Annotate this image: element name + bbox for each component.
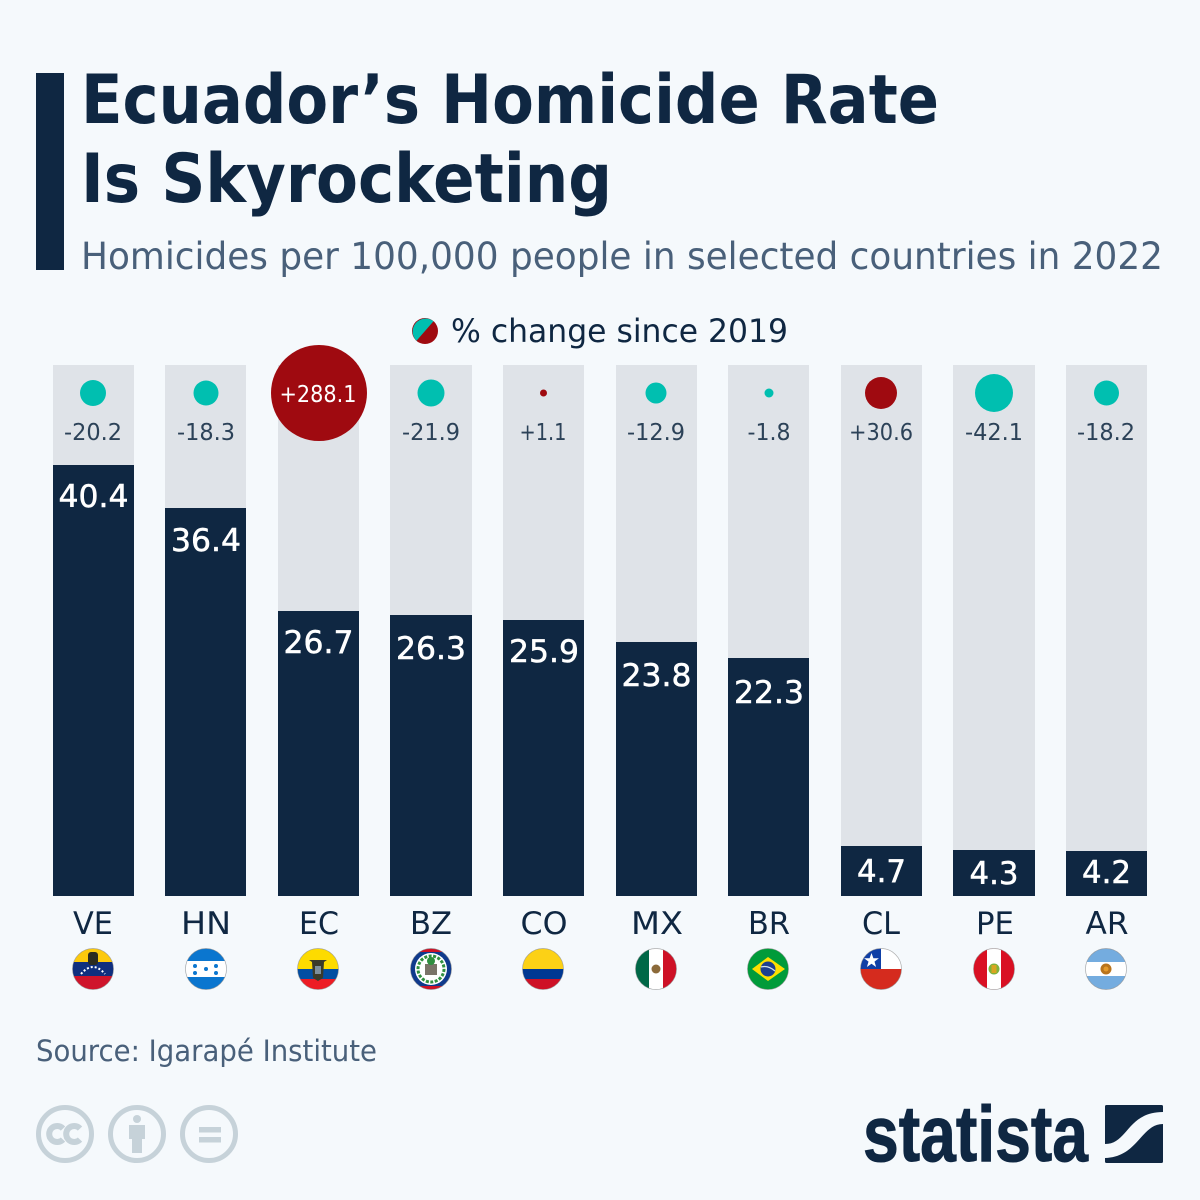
bar: PE 4.3	[953, 850, 1035, 896]
country labels: CL	[862, 906, 901, 942]
flag: Belize	[410, 948, 452, 990]
icon: no derivatives	[182, 1108, 236, 1160]
bar: PE 4.3: 4.3	[970, 856, 1018, 892]
change bubble: PE -42.1	[965, 374, 1023, 446]
bar: HN 36.4	[165, 508, 246, 896]
flag: Chile	[860, 948, 902, 991]
country labels: VE	[73, 906, 113, 942]
country labels: MX	[631, 906, 683, 942]
bar: BZ 26.3	[390, 615, 472, 896]
bar: MX 23.8	[616, 642, 697, 896]
country labels: AR	[1086, 906, 1128, 942]
change bubble: BZ -21.9: -21.9	[402, 420, 460, 446]
bar track: BZ	[390, 365, 472, 896]
bar track: PE	[953, 365, 1035, 896]
flag: Venezuela	[72, 948, 114, 991]
change bubble: CL +30.6: +30.6	[849, 420, 913, 446]
change bubble: CL +30.6	[849, 377, 913, 446]
flag: Argentina	[1085, 948, 1127, 990]
change bubble: MX -12.9	[627, 382, 685, 446]
bar track: CL	[841, 365, 922, 896]
bar: CL 4.7	[841, 846, 922, 896]
change bubble: VE -20.2: -20.2	[64, 420, 122, 446]
country labels: PE	[976, 906, 1014, 942]
country labels: BR	[748, 906, 790, 942]
change bubble: HN -18.3	[177, 380, 235, 446]
bar track: MX	[616, 365, 697, 896]
change bubble: BR -1.8	[748, 388, 790, 446]
country labels: HN	[181, 906, 231, 942]
change bubble: HN -18.3: -18.3	[177, 420, 235, 446]
bar: BR 22.3: 22.3	[734, 675, 804, 711]
legend: % change since 2019: % change since 2019	[451, 312, 788, 350]
change bubble: BR -1.8: -1.8	[748, 420, 790, 446]
title: Is Skyrocketing	[81, 140, 612, 219]
flag: Brazil	[747, 948, 789, 990]
logo: statista wordmark: statista	[863, 1089, 1089, 1178]
country labels	[73, 906, 1128, 942]
bar: BZ 26.3: 26.3	[396, 631, 466, 667]
country labels: CO	[520, 906, 568, 942]
logo: statista mark	[1105, 1105, 1163, 1163]
bar: MX 23.8: 23.8	[622, 658, 692, 694]
flag: Colombia	[522, 948, 564, 991]
flag: Peru	[973, 948, 1015, 990]
title: Ecuador’s Homicide Rate	[81, 61, 939, 140]
subtitle: Homicides per 100,000 people in selected countries in 2022	[81, 235, 1163, 278]
bar: EC 26.7: 26.7	[284, 625, 354, 661]
icon: attribution	[110, 1108, 164, 1160]
change bubble: VE -20.2	[64, 380, 122, 446]
country labels: BZ	[410, 906, 452, 942]
title accent bar	[36, 73, 64, 270]
bar track: VE	[53, 365, 134, 896]
title	[81, 61, 939, 219]
change bubble: EC +288.1	[271, 345, 367, 441]
bar: AR 4.2: 4.2	[1082, 855, 1131, 891]
bar track: HN	[165, 365, 246, 896]
bar: CO 25.9	[503, 620, 584, 896]
change bubble: PE -42.1: -42.1	[965, 420, 1023, 446]
flag: Ecuador	[297, 948, 339, 991]
bar track: CO	[503, 365, 584, 896]
flag: Honduras	[185, 948, 227, 990]
source: Source: Igarapé Institute	[36, 1034, 377, 1068]
bar track: BR	[728, 365, 809, 896]
change bubble: CO +1.1: +1.1	[520, 420, 566, 446]
bar: CO 25.9: 25.9	[509, 634, 579, 670]
bar: HN 36.4: 36.4	[171, 523, 241, 559]
bar: EC 26.7	[278, 611, 359, 896]
country labels: EC	[299, 906, 339, 942]
change bubble: EC +288.1: +288.1	[280, 382, 356, 408]
change bubble: MX -12.9: -12.9	[627, 420, 685, 446]
change bubble: AR -18.2	[1077, 380, 1135, 446]
flag outlines	[72, 948, 1126, 990]
bar: BR 22.3	[728, 658, 809, 896]
bar: VE 40.4	[53, 465, 134, 896]
bar: VE 40.4: 40.4	[58, 479, 128, 515]
bar track: EC	[278, 365, 359, 896]
change bubble: AR -18.2: -18.2	[1077, 420, 1135, 446]
change bubble: CO +1.1	[520, 390, 566, 446]
bar track: AR	[1066, 365, 1147, 896]
change bubble: BZ -21.9	[402, 380, 460, 446]
bar chart	[53, 365, 1147, 896]
flag: Mexico	[635, 948, 678, 990]
icon: creative commons	[38, 1108, 92, 1160]
bar: CL 4.7: 4.7	[857, 854, 906, 890]
bar: AR 4.2	[1066, 851, 1147, 896]
